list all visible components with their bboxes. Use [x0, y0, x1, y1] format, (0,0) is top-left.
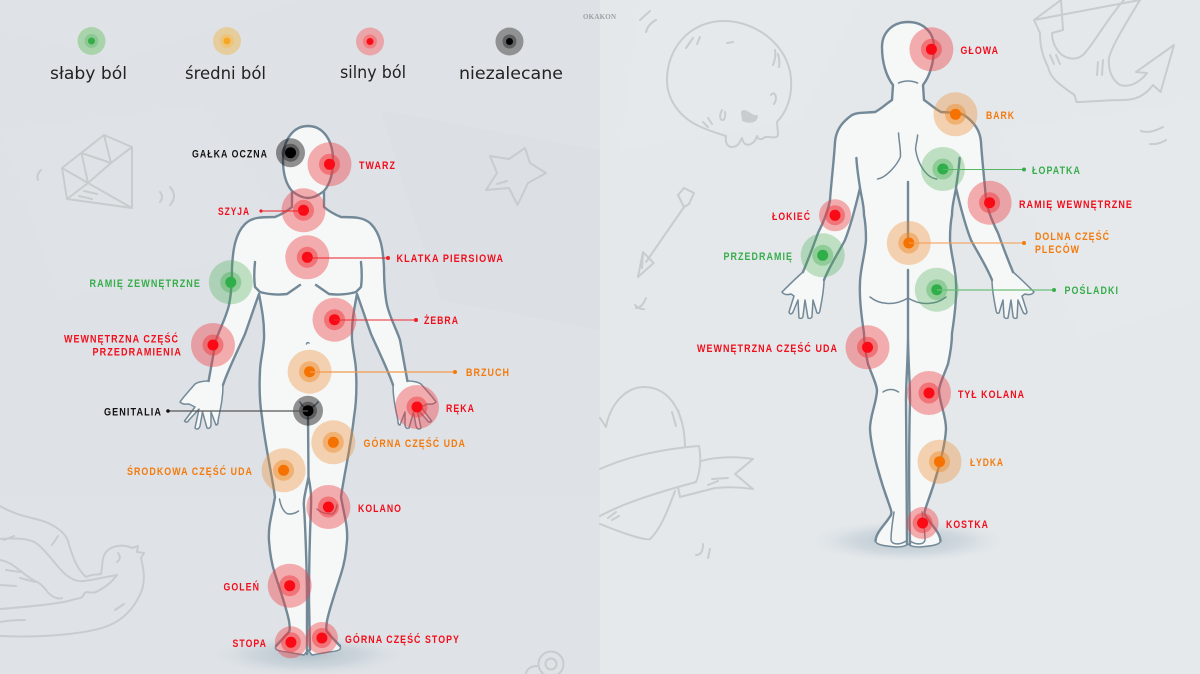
labels: front: [64, 148, 510, 650]
spot: wewnętrzna część uda: [846, 325, 890, 369]
panel: back of body: [697, 22, 1133, 562]
doodle: heart with ribbon: [600, 387, 753, 539]
spot: górna część uda: [311, 420, 355, 464]
labels: front: ŻEBRA: [424, 314, 459, 327]
legend item: średni ból: [185, 27, 266, 84]
spot: brzuch: [288, 350, 332, 394]
labels: front: KOLANO: [358, 503, 402, 515]
spot: klatka piersiowa: [285, 235, 329, 279]
labels: front: GENITALIA: [104, 406, 162, 418]
spot: ramię wewnętrzne: [968, 181, 1012, 225]
watermark: OKAKON: [583, 13, 616, 21]
doodle: skull: [667, 21, 791, 147]
spot: wewnętrzna część przedramienia: [191, 323, 235, 367]
panel: front of body: [64, 126, 510, 674]
labels: front: GÓRNA CZĘŚĆ STOPY: [345, 633, 460, 646]
spot: ramię zewnętrzne: [209, 260, 253, 304]
spot: gałka oczna: [276, 138, 305, 167]
spot: twarz: [308, 142, 352, 186]
legend item: słaby ból: słaby ból: [50, 64, 127, 84]
labels: back: ŁOPATKA: [1032, 165, 1081, 177]
legend: [50, 27, 563, 84]
labels: back: POŚLADKI: [1064, 284, 1119, 297]
legend item: silny ból: silny ból: [340, 63, 406, 83]
labels: front: RAMIĘ ZEWNĘTRZNE: [90, 278, 201, 290]
leader lines: front: [166, 209, 457, 413]
labels: front: GÓRNA CZĘŚĆ UDA: [364, 437, 466, 450]
spot: łopatka: [921, 147, 965, 191]
spot: bark: [934, 92, 978, 136]
spot: ręka: [395, 385, 439, 429]
labels: back: BARK: [986, 110, 1015, 122]
spot: dolna część pleców: [887, 221, 931, 265]
doodle: swan: [0, 506, 144, 637]
labels: back: TYŁ KOLANA: [958, 389, 1025, 401]
legend item: silny ból: [340, 28, 406, 83]
spot: pośladki: [915, 268, 959, 312]
labels: front: ŚRODKOWA CZĘŚĆ UDA: [127, 465, 253, 478]
labels: front: SZYJA: [218, 206, 250, 218]
spot: szyja: [282, 188, 326, 232]
spot: żebra: [312, 298, 356, 342]
labels: front: STOPA: [232, 638, 267, 650]
spot: kostka: [907, 507, 939, 539]
spot: tył kolana: [907, 371, 951, 415]
labels: back: RAMIĘ WEWNĘTRZNE: [1019, 199, 1133, 211]
labels: back: PRZEDRAMIĘ: [724, 251, 793, 263]
back ground shadow: [811, 520, 1005, 562]
front ground shadow: [213, 635, 403, 674]
spot: głowa: [909, 27, 953, 71]
legend item: średni ból: średni ból: [185, 64, 266, 84]
labels: front: RĘKA: [446, 403, 475, 415]
spot: łokieć: [819, 199, 851, 231]
labels: front: BRZUCH: [466, 367, 510, 379]
spot: górna część stopy: [306, 622, 338, 654]
labels: front: GOLEŃ: [224, 580, 260, 594]
leader lines: back: [909, 168, 1056, 292]
labels: back: GŁOWA: [960, 45, 999, 57]
labels: front: TWARZ: [359, 160, 396, 172]
labels: front: KLATKA PIERSIOWA: [396, 253, 504, 265]
labels: front: PRZEDRAMIENIA: [92, 346, 182, 358]
front body figure: [180, 126, 436, 655]
spot: środkowa część uda: [262, 448, 306, 492]
spot: goleń: [268, 564, 312, 608]
labels: back: DOLNA CZĘŚĆ: [1035, 230, 1110, 243]
labels: front: WEWNĘTRZNA CZĘŚĆ: [64, 332, 179, 346]
legend item: niezalecane: [459, 28, 563, 84]
spot: łydka: [918, 440, 962, 484]
labels: back: [697, 45, 1133, 531]
labels: back: WEWNĘTRZNA CZĘŚĆ UDA: [697, 342, 838, 355]
spot: przedramię: [801, 233, 845, 277]
labels: back: KOSTKA: [946, 519, 989, 531]
doodle: snail: [526, 652, 564, 674]
labels: back: PLECÓW: [1035, 243, 1080, 256]
legend item: słaby ból: [50, 27, 127, 84]
doodle: arrow: [638, 188, 694, 277]
labels: back: ŁOKIEĆ: [772, 210, 811, 223]
labels: front: GAŁKA OCZNA: [192, 148, 268, 160]
doodle: diamond: [37, 135, 174, 208]
legend item: niezalecane: niezalecane: [459, 64, 563, 84]
spot: genitalia: [293, 396, 323, 426]
doodle: star: [486, 148, 546, 205]
back body figure: [782, 22, 1034, 547]
labels: back: ŁYDKA: [970, 457, 1004, 469]
doodle: small marks: [635, 11, 1166, 558]
spot: stopa: [275, 626, 307, 658]
spot: kolano: [306, 485, 350, 529]
doodle: anchor: [1034, 0, 1174, 102]
